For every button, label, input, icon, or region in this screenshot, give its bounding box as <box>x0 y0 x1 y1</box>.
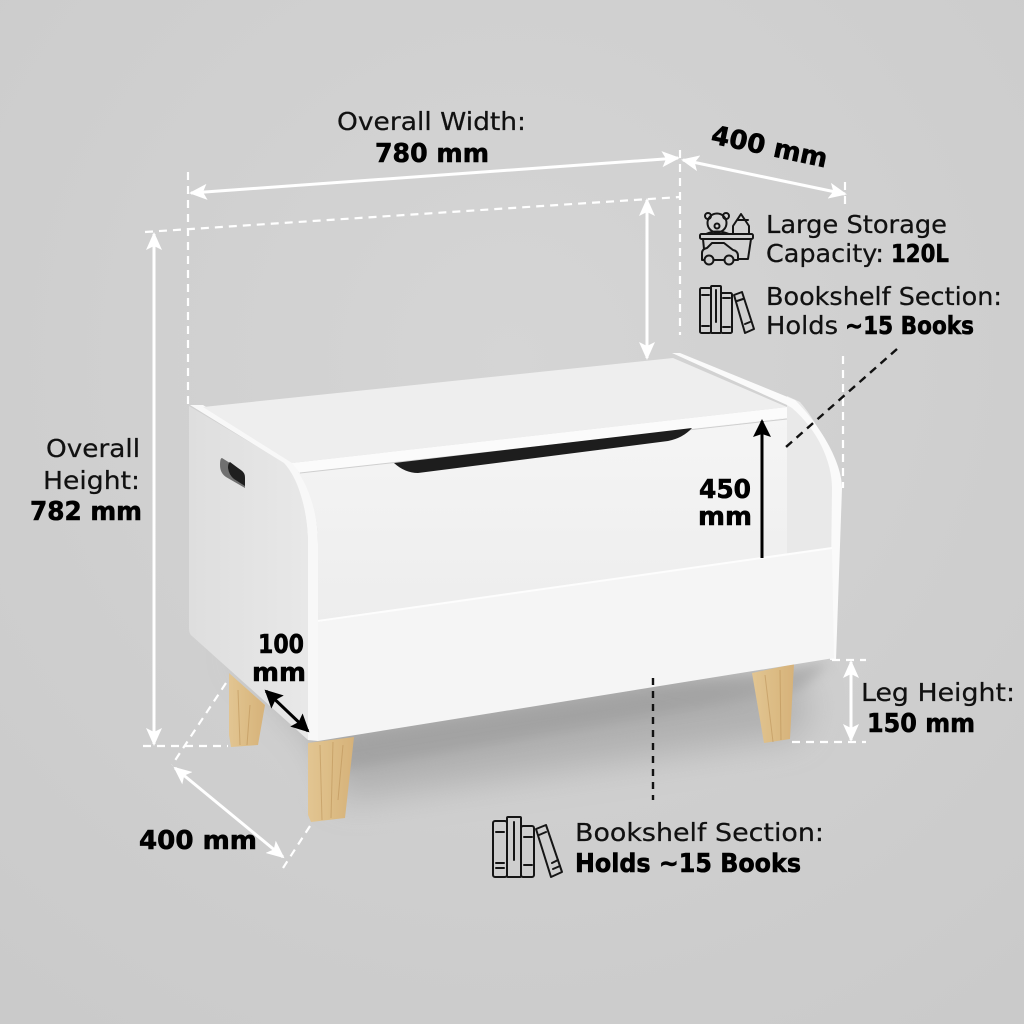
label: overall height <box>30 434 142 527</box>
label: panel thickness: mm <box>252 658 306 688</box>
label: panel thickness <box>252 630 306 688</box>
arrow: depth bottom <box>175 768 283 857</box>
icon: books upper <box>700 286 754 333</box>
text: large storage capacity: 120L <box>891 239 949 268</box>
left side panel <box>189 406 308 740</box>
text: bookshelf section upper: Bookshelf Section: <box>766 282 1002 311</box>
left side handle <box>220 458 245 488</box>
floor shadow <box>235 640 830 800</box>
arrow: overall width <box>191 158 678 193</box>
label: interior height: mm <box>698 502 752 532</box>
label: leg height: 150 mm <box>867 709 975 739</box>
lid front edge <box>292 407 787 473</box>
storage bench illustration <box>189 353 842 822</box>
icon: books lower <box>493 817 562 877</box>
text: bookshelf section lower: Holds ~15 Books <box>575 849 801 879</box>
arrow: leg height <box>850 662 852 740</box>
label: top depth: 400 mm <box>709 121 830 174</box>
arrow: overall height <box>152 234 156 744</box>
dashed guide lines <box>143 150 866 868</box>
right curved rim <box>672 353 842 660</box>
leader: upper bookshelf callout <box>786 349 897 447</box>
text: large storage capacity <box>766 210 949 268</box>
lid cut-out handle <box>394 428 692 473</box>
front left leg <box>308 737 354 822</box>
back right leg <box>752 664 794 743</box>
inner compartment <box>298 418 787 622</box>
left curved rim <box>190 405 318 741</box>
arrow: interior height <box>760 421 764 558</box>
text: bookshelf section upper: Holds <box>766 311 838 340</box>
label: overall height: 782 mm <box>30 497 142 527</box>
label: overall height: Overall <box>46 434 140 463</box>
front bookshelf panel <box>318 548 834 741</box>
arrow: panel thickness <box>266 691 308 731</box>
text: bookshelf section lower <box>575 818 824 879</box>
label: interior height: 450 <box>699 475 751 505</box>
label: bottom depth: 400 mm <box>139 826 257 856</box>
arrow: depth top <box>683 160 845 194</box>
arrow: lid clearance <box>646 200 648 358</box>
text: large storage capacity: Capacity: <box>766 239 884 268</box>
label: leg height <box>861 678 1015 739</box>
leader: lower bookshelf callout <box>652 678 654 800</box>
label: overall width: Overall Width: <box>337 107 526 136</box>
label: overall width <box>337 107 526 169</box>
label: interior height <box>698 475 752 532</box>
right inner side <box>787 396 835 562</box>
text: bookshelf section upper <box>766 282 1002 340</box>
text: bookshelf section upper: ~15 Books <box>845 311 974 340</box>
text: bookshelf section lower: Bookshelf Section: <box>575 818 824 847</box>
label: leg height: Leg Height: <box>861 678 1015 707</box>
lid shadow line <box>300 419 787 473</box>
label: panel thickness: 100 <box>258 630 304 660</box>
lid top <box>203 358 787 463</box>
icon: toy storage box <box>700 213 753 264</box>
front panel top edge <box>318 548 832 621</box>
back left leg <box>229 673 265 747</box>
text: large storage capacity: Large Storage <box>766 210 947 239</box>
label: overall height: Height: <box>43 466 140 495</box>
label: overall width: 780 mm <box>375 139 489 169</box>
